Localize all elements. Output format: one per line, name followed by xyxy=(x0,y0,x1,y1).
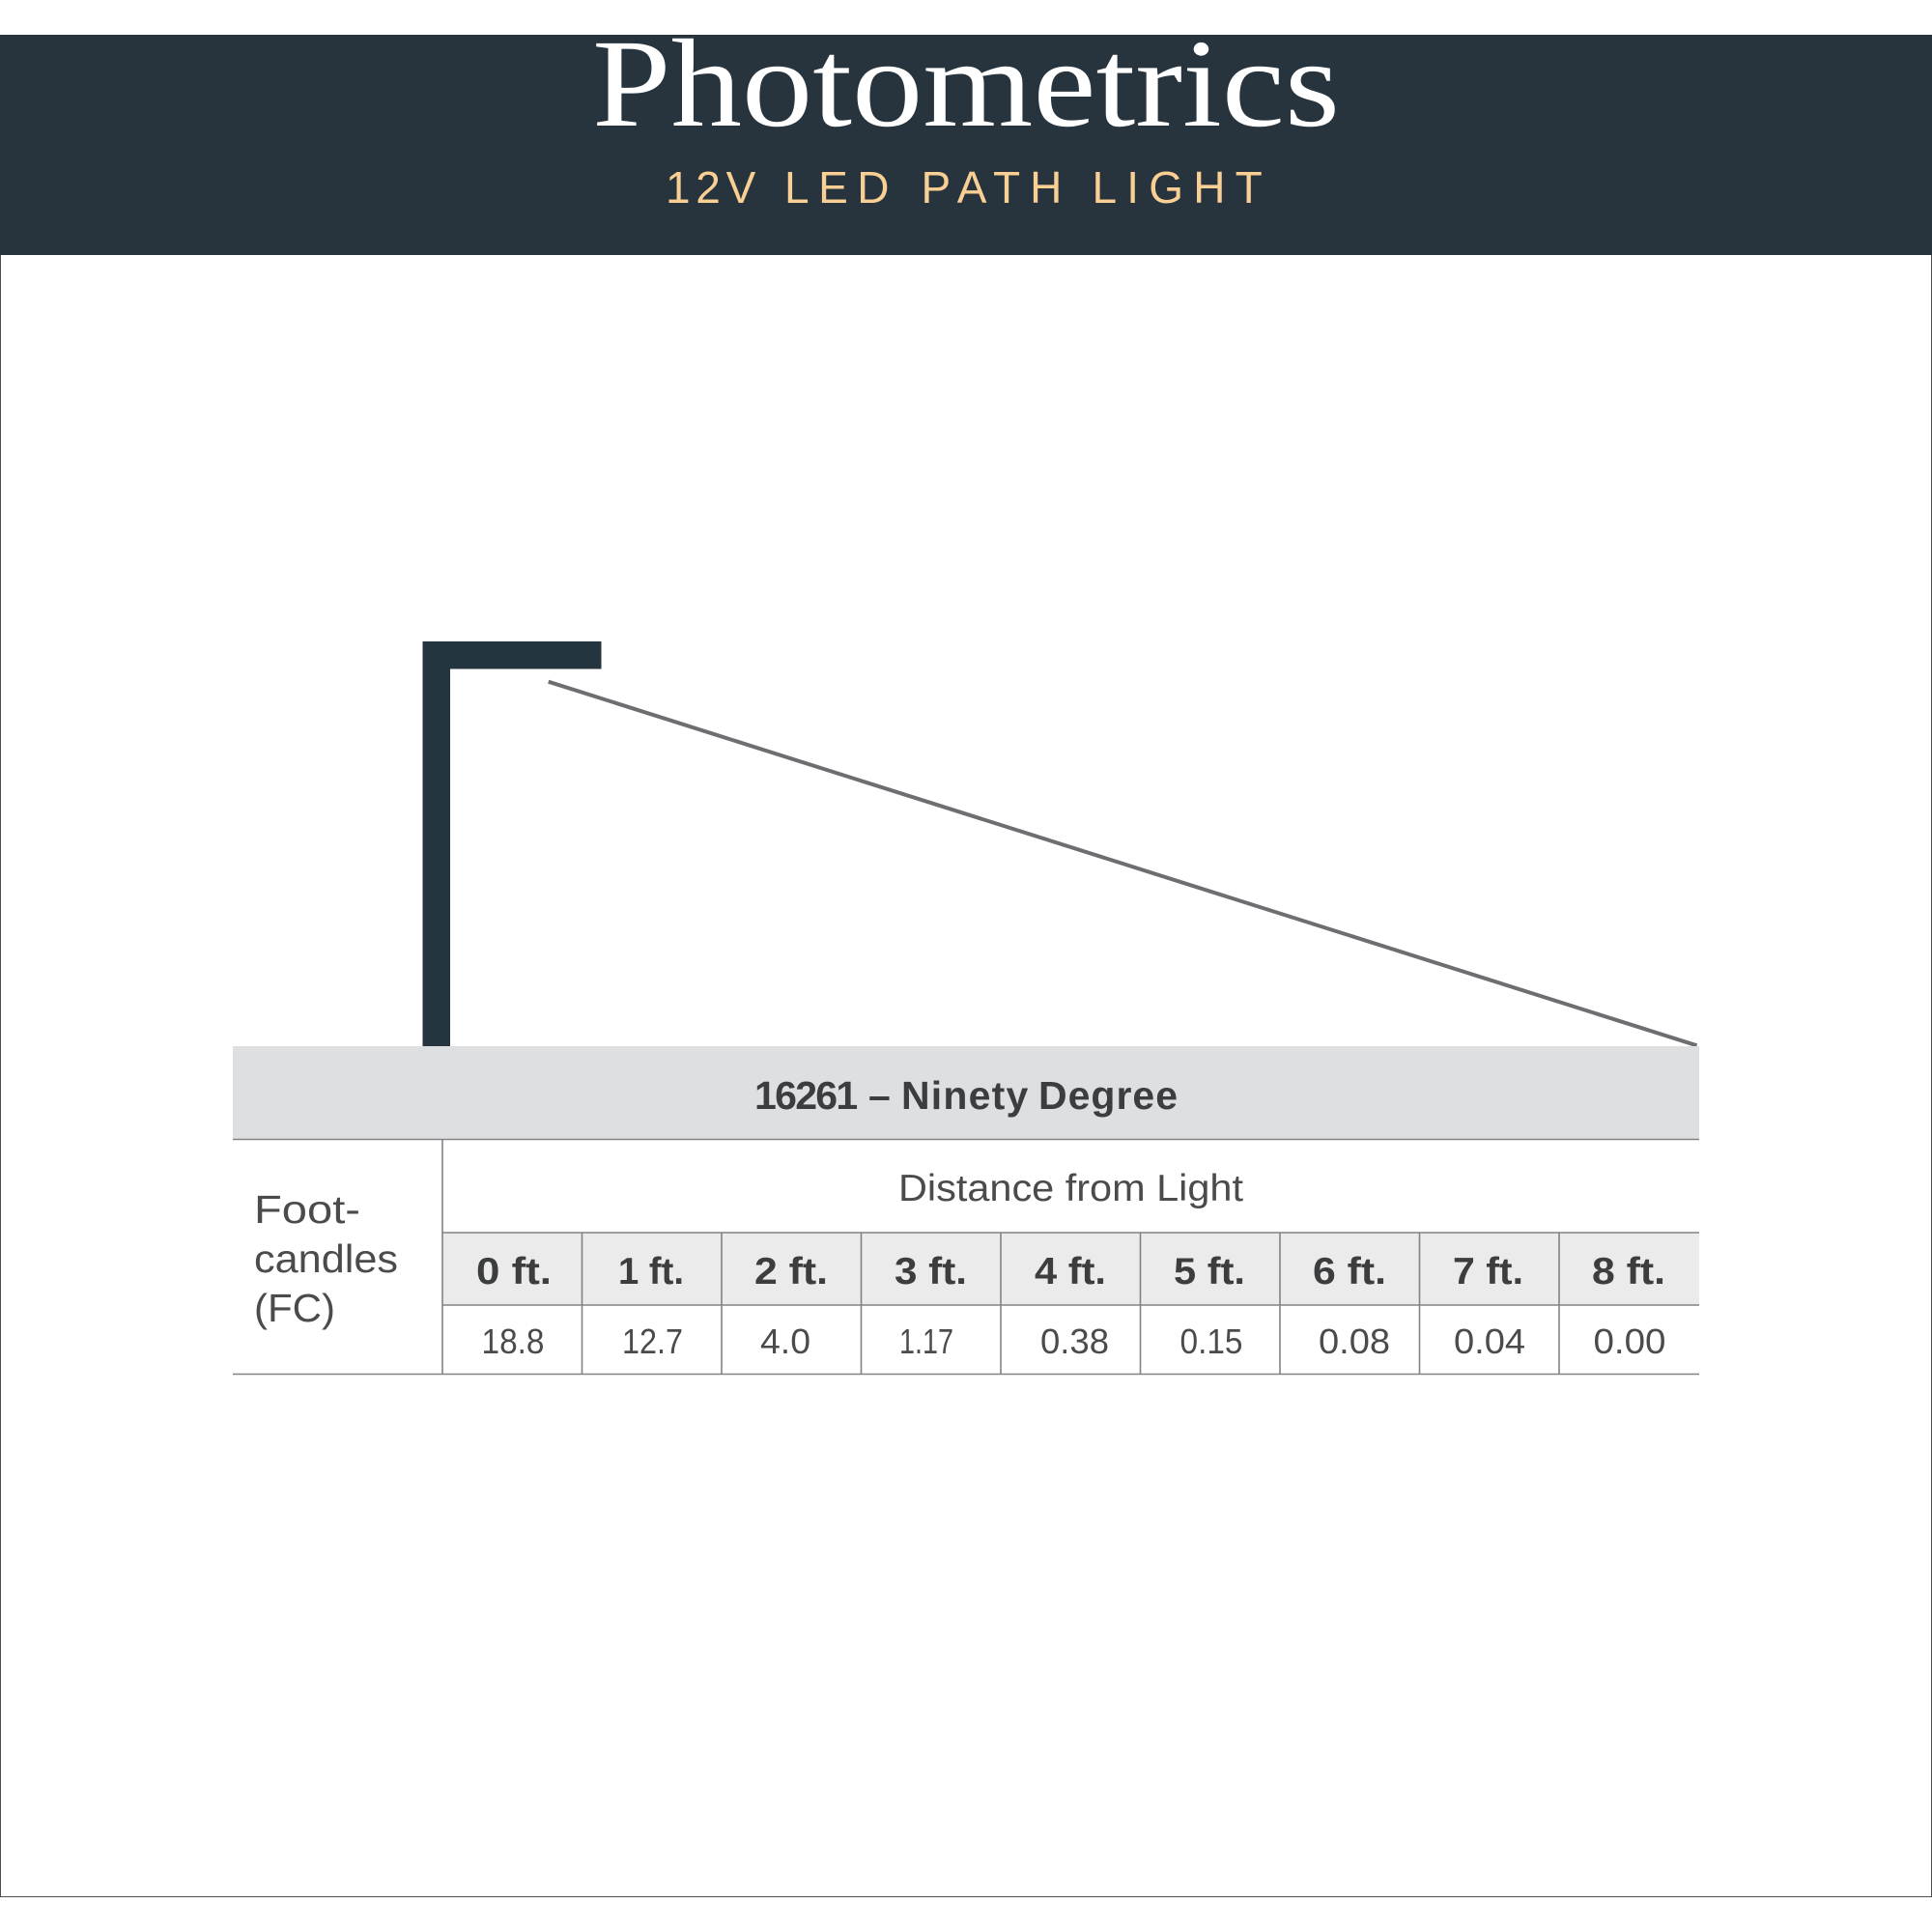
header banner xyxy=(0,14,1932,255)
subtitle: PATH xyxy=(922,162,1071,213)
title: Photometrics xyxy=(592,14,1340,154)
table rules xyxy=(233,1140,1699,1374)
foot-candle values: 0.38 xyxy=(1040,1321,1109,1361)
table title bar: Ninety xyxy=(901,1073,1030,1118)
foot-candle values: 4.0 xyxy=(760,1321,810,1361)
row label: foot-candles xyxy=(254,1187,398,1330)
foot-candle values: 1.17 xyxy=(899,1321,953,1361)
distance header row: 2 ft. xyxy=(754,1251,828,1293)
foot-candle values: 0.08 xyxy=(1319,1321,1390,1361)
light beam line xyxy=(549,682,1697,1045)
distance header row: 0 ft. xyxy=(476,1251,552,1293)
foot-candle values xyxy=(481,1321,1665,1361)
row label: foot-candles: (FC) xyxy=(254,1286,335,1330)
table title bar: – xyxy=(868,1073,891,1118)
table title bar xyxy=(233,1046,1699,1139)
subtitle: LIGHT xyxy=(1092,162,1272,213)
photometric table xyxy=(233,1046,1699,1374)
icon: path light post xyxy=(423,641,601,1046)
foot-candle values: 12.7 xyxy=(622,1321,683,1361)
foot-candle values: 0.04 xyxy=(1454,1321,1525,1361)
distance header row xyxy=(442,1233,1699,1305)
distance header row: 4 ft. xyxy=(1035,1251,1106,1293)
table title bar: 16261 xyxy=(754,1073,857,1118)
table title bar: Degree xyxy=(1038,1073,1179,1118)
subtitle: 12V xyxy=(666,162,761,213)
foot-candle values: 0.15 xyxy=(1180,1321,1242,1361)
distance header row: 7 ft. xyxy=(1453,1251,1523,1293)
distance header row: 8 ft. xyxy=(1592,1251,1665,1293)
row label: foot-candles: candles xyxy=(254,1236,398,1281)
distance header row: 3 ft. xyxy=(895,1251,967,1293)
distance header row: 6 ft. xyxy=(1313,1251,1386,1293)
foot-candle values: 18.8 xyxy=(481,1321,545,1361)
column heading: distance from light: Distance from Light xyxy=(898,1168,1243,1209)
distance header row: 5 ft. xyxy=(1174,1251,1245,1293)
foot-candle values: 0.00 xyxy=(1594,1321,1665,1361)
subtitle: LED xyxy=(784,162,898,213)
row label: foot-candles: Foot- xyxy=(254,1187,360,1232)
distance header row: 1 ft. xyxy=(618,1251,684,1293)
